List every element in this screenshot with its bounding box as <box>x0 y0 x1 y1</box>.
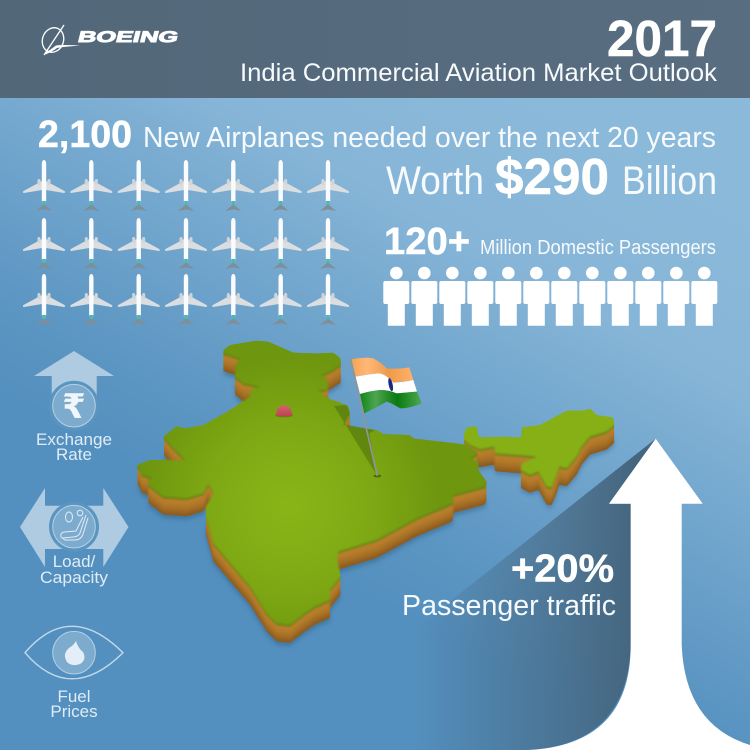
arrow shadow <box>395 439 656 750</box>
label: load capacity: Capacity <box>40 568 109 587</box>
headline: worth 290 billion: $290 <box>495 148 609 205</box>
flag shadow on map <box>334 405 377 476</box>
headline: new airplanes: 2,100 <box>38 114 132 156</box>
flag of India <box>350 358 422 477</box>
map: India mainland <box>137 341 487 646</box>
callout: passenger traffic growth <box>402 548 616 622</box>
icon: load capacity <box>20 488 128 567</box>
callout: passenger traffic growth: +20% <box>511 548 614 590</box>
label: load capacity: Load/ <box>53 552 96 571</box>
logo: Boeing <box>39 25 180 55</box>
airplane grid <box>23 160 349 325</box>
headline: domestic passengers: 120+ <box>384 221 470 263</box>
label: exchange rate: Exchange <box>36 430 112 449</box>
title: year: 2017 <box>607 10 717 67</box>
icon: exchange rate <box>34 351 114 431</box>
label: exchange rate: Rate <box>56 445 92 464</box>
title: subtitle: India Commercial Aviation Market Outlook <box>240 59 718 87</box>
headline: worth 290 billion <box>386 148 717 205</box>
headline: worth 290 billion: Worth <box>386 159 484 203</box>
headline: domestic passengers: Million Domestic Passengers <box>480 237 716 259</box>
callout: passenger traffic growth: Passenger traffic <box>402 590 616 622</box>
headline: new airplanes: New Airplanes needed over the next 20 years <box>143 122 716 154</box>
header band <box>0 0 750 98</box>
map: India north-east <box>464 408 614 508</box>
label: fuel prices: Prices <box>50 702 98 721</box>
label: fuel prices: Fuel <box>57 687 91 706</box>
label: load capacity <box>40 552 109 587</box>
label: exchange rate <box>36 430 112 464</box>
growth arrow <box>528 439 750 750</box>
headline: domestic passengers <box>384 221 716 263</box>
passenger figures <box>383 267 717 326</box>
headline: worth 290 billion: Billion <box>622 159 717 203</box>
icon: exchange rate: ₹ <box>62 387 86 427</box>
headline: new airplanes <box>38 114 716 156</box>
map marker: red dome <box>275 405 293 417</box>
icon: fuel prices <box>25 626 123 679</box>
label: fuel prices <box>50 687 98 721</box>
logo: Boeing: BOEING <box>76 29 180 46</box>
